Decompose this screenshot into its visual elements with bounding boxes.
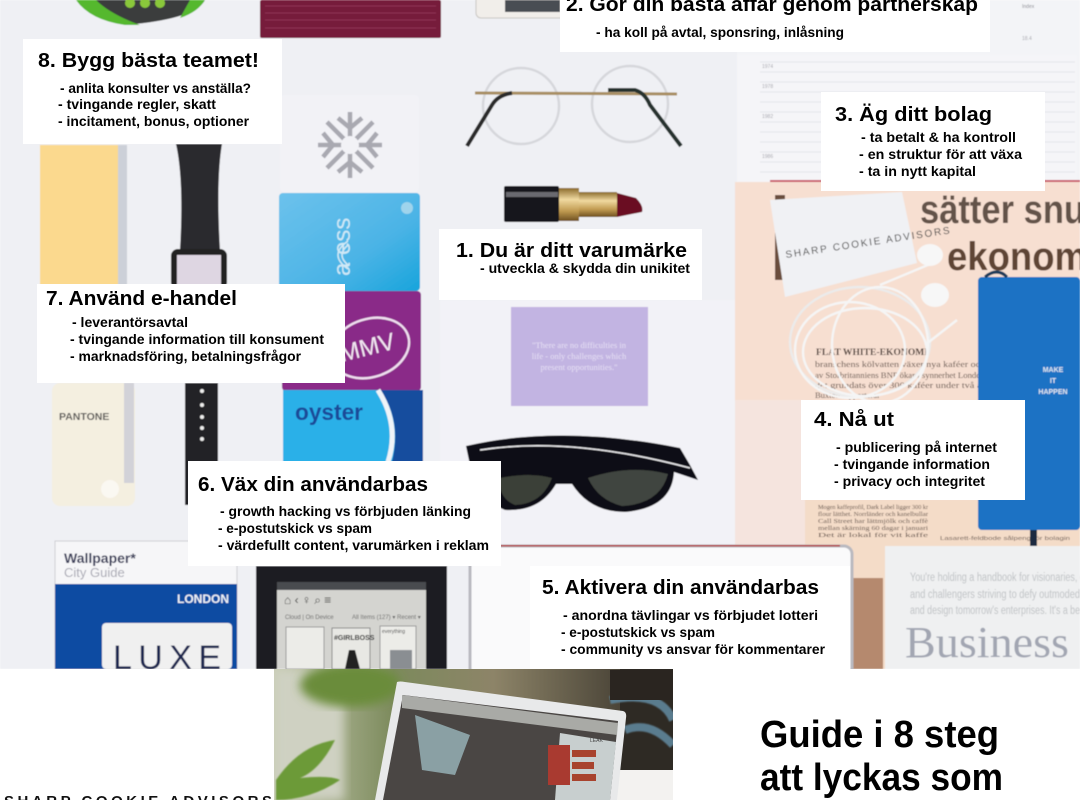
panel: step 4: - publicering på internet bbox=[836, 440, 998, 455]
panel: step 5 bbox=[530, 566, 850, 669]
photo item: peach paper and newspaper bbox=[735, 180, 1080, 669]
panel: step 3: - ta in nytt kapital bbox=[859, 164, 976, 179]
photo item: peach paper and newspaper: Call Street har lättmjölk och caffè bbox=[818, 518, 928, 525]
panel: step 1: - utveckla & skydda din unikitet bbox=[480, 261, 691, 276]
photo item: peach paper and newspaper: av Storbritanniens BNP ökar i synnerhet London bbox=[815, 370, 986, 380]
laptop photo bbox=[274, 663, 680, 800]
photo item: red wallet bbox=[260, 0, 441, 38]
photo item: Wallpaper city guide book bbox=[55, 541, 237, 677]
photo item: round glasses bbox=[467, 66, 681, 146]
photo item: purple MMV card bbox=[282, 291, 421, 391]
photo item: white document bbox=[737, 0, 1080, 184]
photo item: peach paper and newspaper: flour lätthet. Norrländer och kanelbullar bbox=[818, 511, 929, 518]
photo item: blue access card bbox=[279, 193, 420, 291]
photo item: purple quote card: life - only challenges which bbox=[532, 351, 627, 361]
photo item: green gadget bbox=[76, 0, 205, 25]
photo item: blue notebook: IT bbox=[1050, 378, 1057, 385]
panel: step 6: - growth hacking vs förbjuden länking bbox=[220, 504, 471, 519]
photo item: sharp cookie business card bbox=[770, 192, 952, 297]
laptop photo: LEAK bbox=[590, 738, 603, 744]
photo item: white document: 18.4 bbox=[1022, 36, 1032, 42]
photo item: lipstick bbox=[504, 186, 642, 222]
photo item: Wallpaper city guide book: LUXE bbox=[113, 639, 221, 677]
photo item: peach paper and newspaper: det grundats över 300 kaféer under två år bbox=[815, 380, 985, 390]
photo item: e-reader: Cloud | On Device bbox=[285, 615, 334, 621]
photo item: Wallpaper city guide book: City Guide bbox=[64, 565, 125, 580]
photo item: purple MMV card: MMV bbox=[337, 328, 398, 368]
photo item: blue notebook: MAKE bbox=[1043, 367, 1064, 374]
panel: step 5: - e-postutskick vs spam bbox=[561, 625, 715, 640]
photo item: blue notebook bbox=[978, 272, 1080, 554]
panel: step 4 bbox=[801, 400, 1025, 500]
photo item: pantone swatch bbox=[52, 383, 135, 506]
photo item: white document: 1978 bbox=[762, 84, 773, 90]
panel: step 8: - anlita konsulter vs anställa? bbox=[60, 81, 251, 96]
panel: step 1 bbox=[439, 229, 702, 300]
panel: step 5: - community vs ansvar för kommentarer bbox=[561, 642, 826, 657]
photo item: e-reader: ⌂ ‹ ♀ ⌕ ≡ bbox=[284, 593, 331, 607]
photo item: white document: 1982 bbox=[762, 114, 773, 120]
panel: step 7: 7. Använd e-handel bbox=[46, 287, 237, 310]
photo item: peach paper and newspaper: FLAT WHITE-EKONOMI bbox=[816, 348, 928, 358]
panel: step 7 bbox=[37, 284, 345, 383]
icon: earphones bbox=[790, 244, 957, 403]
panel: step 7: - tvingande information till konsument bbox=[70, 332, 325, 347]
panel: step 3 bbox=[821, 92, 1045, 191]
panel: step 2: - ha koll på avtal, sponsring, inlåsning bbox=[596, 25, 844, 40]
photo item: sharp cookie business card: SHARP COOKIE ADVISORS bbox=[785, 225, 952, 261]
panel: step 8: - incitament, bonus, optioner bbox=[58, 114, 250, 129]
panel: step 4: 4. Nå ut bbox=[814, 408, 894, 431]
photo item: white card with snowflake logo bbox=[280, 95, 419, 192]
panel: step 3: - ta betalt & ha kontroll bbox=[861, 130, 1016, 145]
photo item: purple quote card: present opportunities." bbox=[540, 362, 618, 372]
title: Guide i 8 steg bbox=[760, 714, 1003, 799]
photo item: white document: 1986 bbox=[762, 154, 773, 160]
photo item: blue access card: ess bbox=[329, 218, 356, 255]
photo item: purple quote card: "There are no difficulties in bbox=[532, 340, 627, 350]
photo item: e-reader bbox=[256, 566, 447, 669]
panel: step 8: 8. Bygg bästa teamet! bbox=[38, 49, 259, 72]
panel: step 6: - e-postutskick vs spam bbox=[218, 521, 372, 536]
panel: step 4: - privacy och integritet bbox=[834, 474, 986, 489]
panel: step 5: 5. Aktivera din användarbas bbox=[542, 576, 819, 599]
photo item: peach paper and newspaper: Det är lokal för vit kaffe bbox=[818, 532, 928, 539]
photo item: oyster card: oyster bbox=[295, 399, 363, 425]
photo item: peach paper and newspaper: branschens kölvatten växer nya kaféer och bbox=[815, 359, 986, 369]
photo item: white document: 1974 bbox=[762, 64, 773, 70]
photo item: phone bbox=[476, 0, 566, 18]
panel: step 3: - en struktur för att växa bbox=[859, 147, 1023, 162]
photo item: pantone swatch: PANTONE bbox=[59, 411, 109, 423]
photo item: tablet bbox=[470, 545, 852, 676]
title: Guide i 8 steg: Guide i 8 steg bbox=[760, 714, 999, 756]
photo item: peach paper and newspaper: Buxton rapporterar bbox=[815, 390, 880, 400]
photo item: blue notebook: HAPPEN bbox=[1038, 389, 1068, 396]
photo item: peach paper and newspaper: mellan skärning 60 dagar i januari bbox=[818, 525, 928, 532]
panel: step 4: - tvingande information bbox=[834, 457, 990, 472]
panel: step 8 bbox=[23, 39, 282, 144]
panel: step 3: 3. Äg ditt bolag bbox=[835, 103, 992, 126]
photo item: e-reader: All Items (127) ▾ Recent ▾ bbox=[352, 615, 421, 621]
photo item: yellow colour swatch bbox=[40, 145, 127, 287]
photo item: business handbook bbox=[850, 546, 1080, 669]
photo item: black sunglasses bbox=[466, 435, 698, 512]
photo item: business handbook: Business bbox=[905, 618, 1069, 667]
white footer band bbox=[0, 669, 1080, 800]
photo item: e-reader: #GIRLBOSS bbox=[334, 635, 375, 642]
panel: step 5: - anordna tävlingar vs förbjudet lotteri bbox=[563, 608, 818, 623]
panel: step 6 bbox=[188, 461, 501, 566]
photo item: white document: Index bbox=[1022, 4, 1035, 10]
photo item: blue access card: a bbox=[329, 262, 356, 276]
panel: step 6: - värdefullt content, varumärken i reklam bbox=[218, 538, 489, 553]
photo item: Wallpaper city guide book: Wallpaper* bbox=[64, 550, 136, 566]
photo item: smartwatch bbox=[171, 144, 227, 505]
panel: step 8: - tvingande regler, skatt bbox=[58, 97, 217, 112]
photo item: oyster card bbox=[283, 390, 423, 462]
photo item: purple quote card bbox=[511, 307, 648, 406]
panel: step 7: - marknadsföring, betalningsfrågor bbox=[70, 349, 302, 364]
photo item: peach paper and newspaper: Mogen kaffeprofil, Dark Label ligger 300 kr bbox=[818, 504, 929, 511]
photo item: Wallpaper city guide book: LONDON bbox=[177, 592, 229, 606]
photo item: peach paper and newspaper: Lasarett-feldbode sålpeng för bolagin bbox=[940, 535, 1070, 542]
panel: step 7: - leverantörsavtal bbox=[72, 315, 188, 330]
title: Guide i 8 steg: att lyckas som bbox=[760, 757, 1003, 799]
panel: step 2 bbox=[560, 0, 990, 52]
panel: step 6: 6. Väx din användarbas bbox=[198, 473, 428, 496]
photo item: e-reader: everything bbox=[382, 629, 405, 635]
panel: step 1: 1. Du är ditt varumärke bbox=[456, 239, 687, 262]
